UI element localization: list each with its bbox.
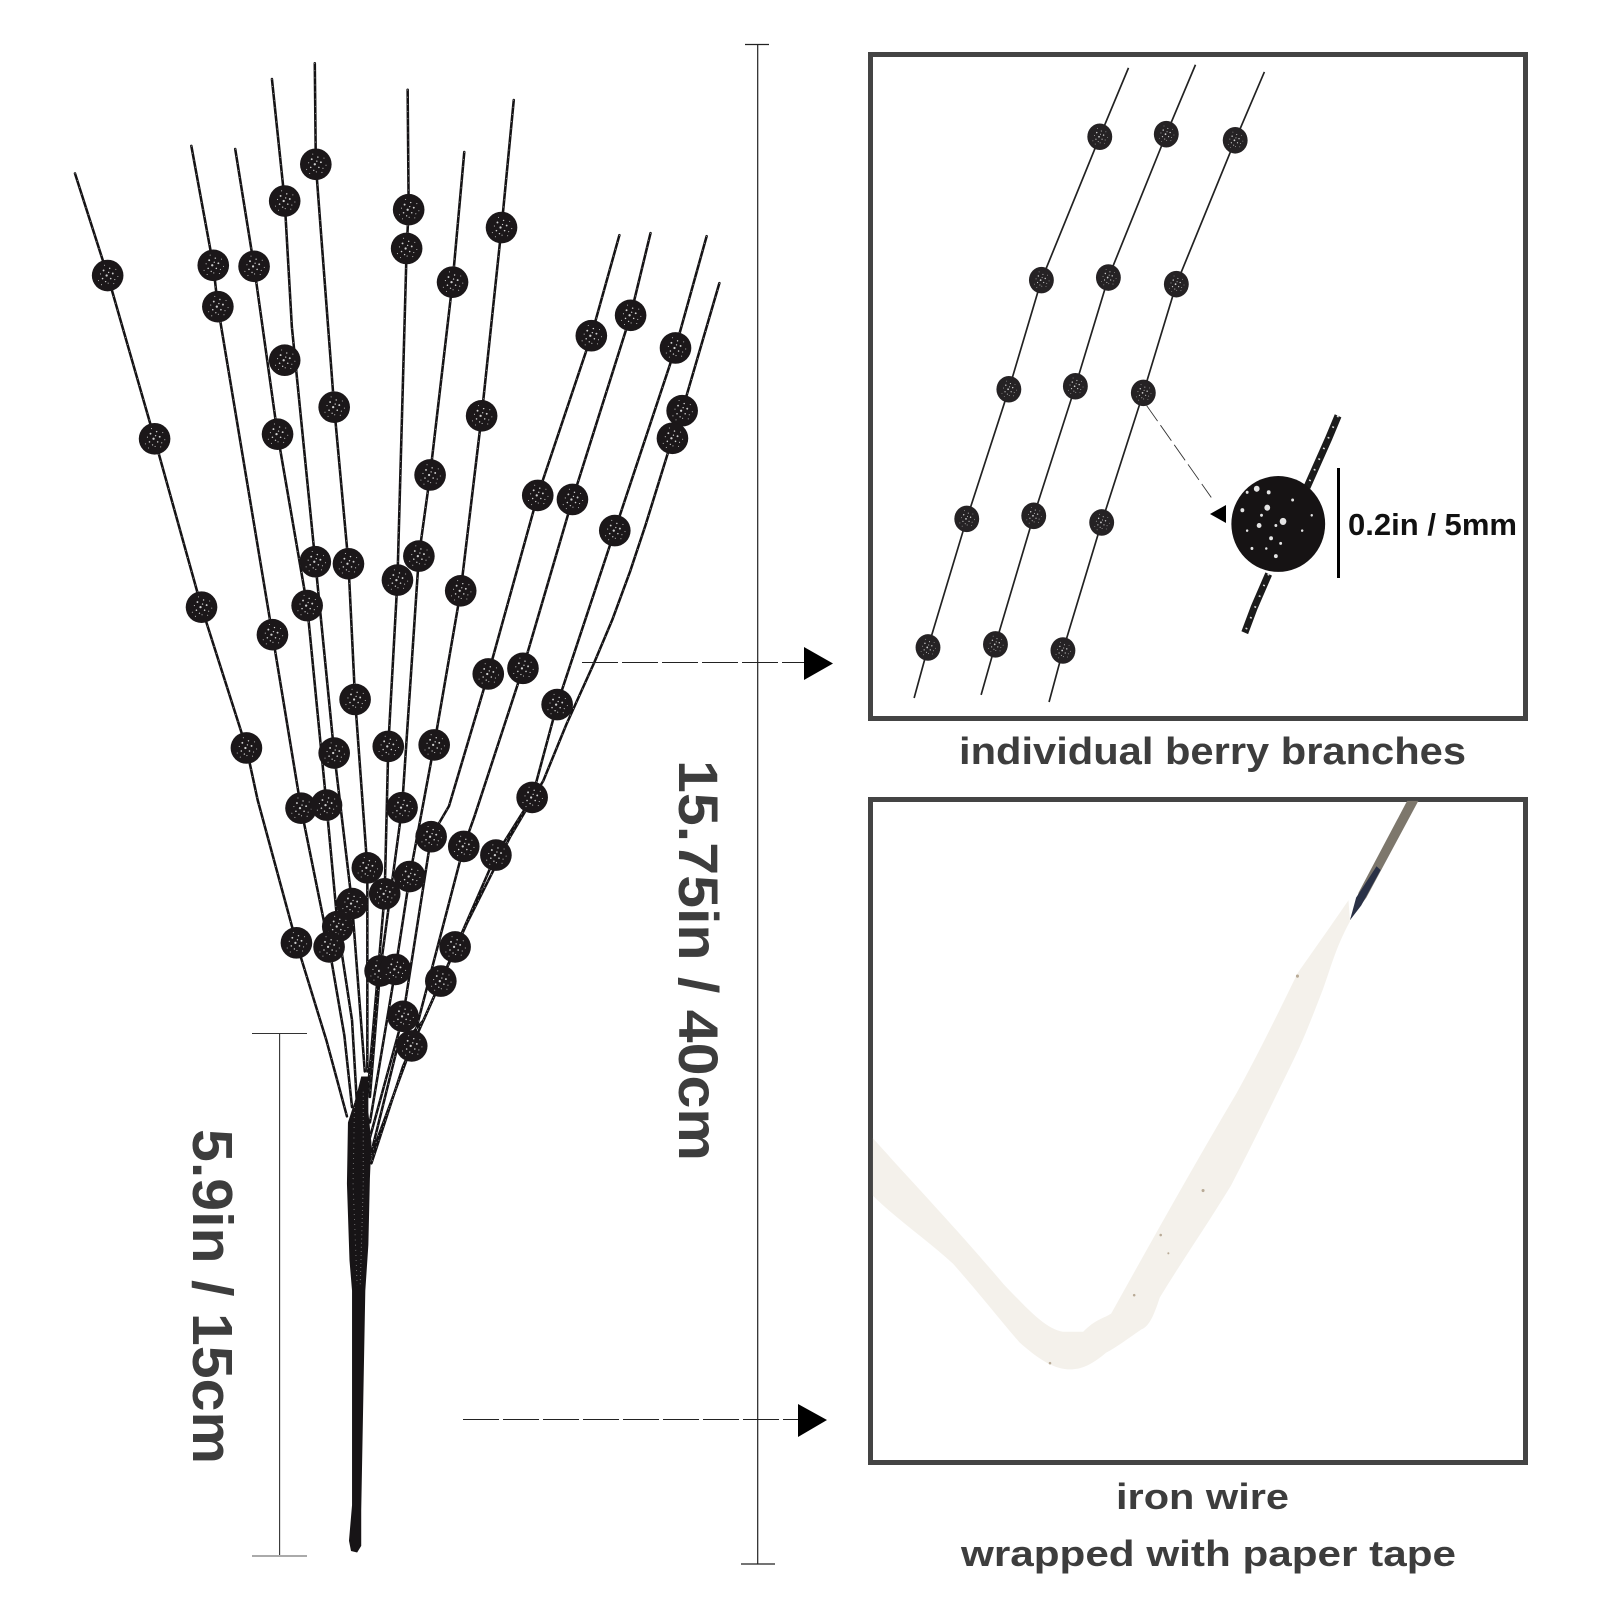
panel: individual berry branches xyxy=(870,54,1526,718)
pointer arrowhead xyxy=(1210,505,1226,523)
arrow: to berry branches panel xyxy=(582,647,833,680)
arrow: to iron wire panel xyxy=(463,1404,827,1437)
berries xyxy=(92,148,698,1062)
size bar xyxy=(1337,468,1340,578)
branches xyxy=(75,63,719,1163)
caption: iron wire: iron wire xyxy=(1116,1476,1289,1517)
product photo: glitter berry spray xyxy=(75,63,719,1553)
label: stem length: 5.9in / 15cm xyxy=(180,1129,244,1464)
three branches with berries xyxy=(914,65,1264,702)
caption: wrapped with paper tape: wrapped with paper tape xyxy=(960,1533,1456,1574)
label: overall height: 15.75in / 40cm xyxy=(667,760,730,1161)
dimension line: overall height xyxy=(741,44,775,1564)
panel: iron wire xyxy=(870,800,1526,1462)
stem xyxy=(347,1077,371,1553)
caption: berry branches: individual berry branches xyxy=(959,731,1466,773)
size label: 0.2in / 5mm xyxy=(1348,507,1517,542)
dimension line: stem length xyxy=(252,1034,307,1556)
wrapped wire photo xyxy=(873,801,1418,1369)
enlarged berry xyxy=(1231,416,1338,633)
dashed pointer to enlarged berry xyxy=(1147,406,1211,497)
